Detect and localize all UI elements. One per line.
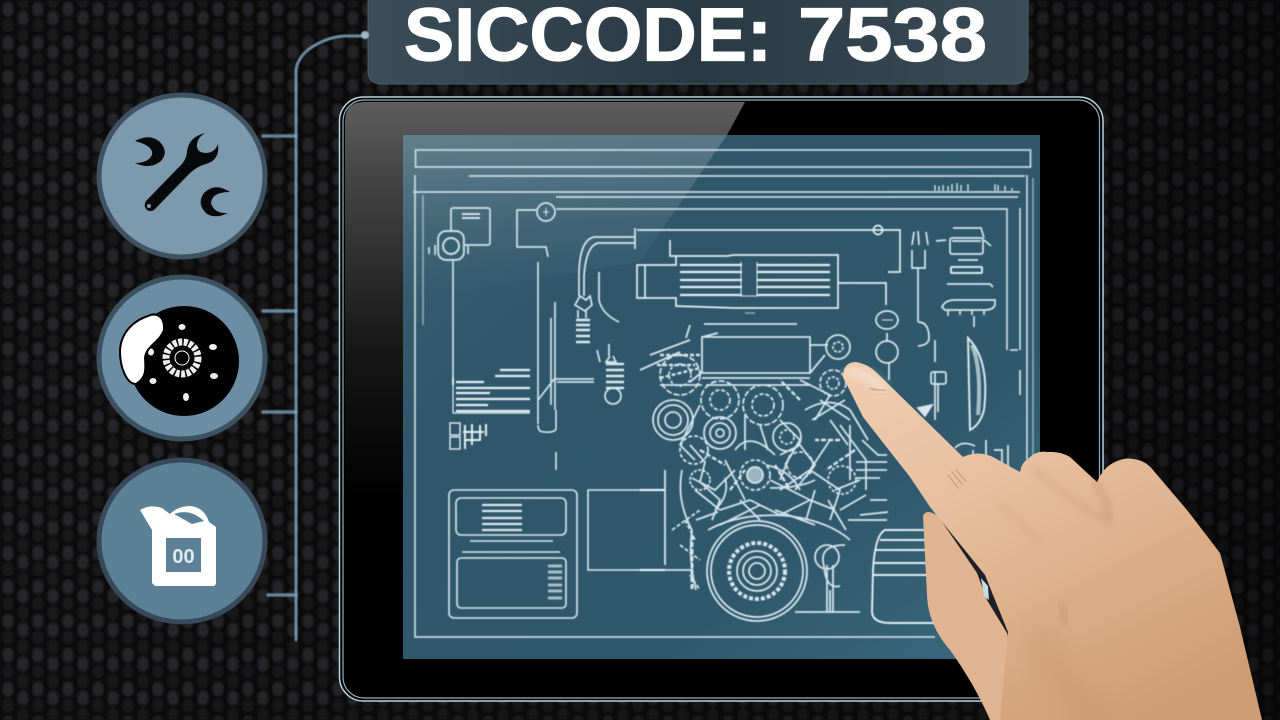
blueprint: right hand components xyxy=(876,228,1020,470)
hand pointing at screen xyxy=(843,362,1262,720)
connector lines xyxy=(263,31,369,640)
thumb xyxy=(923,512,1020,720)
blueprint: empty box xyxy=(588,490,665,570)
blueprint: gauge and left piping xyxy=(429,203,594,424)
engine: crank pulley xyxy=(707,521,807,621)
blueprint: bottom left panel xyxy=(449,490,665,618)
blueprint: lower right housing xyxy=(872,530,960,623)
engine: pulleys and gears xyxy=(653,335,856,569)
blueprint: intake pipes and small fittings xyxy=(575,228,635,404)
icon circle: brake disc xyxy=(99,277,265,439)
fingernail edge xyxy=(870,388,886,391)
screen xyxy=(403,135,1040,659)
engine: block squiggles xyxy=(640,340,888,590)
hand shading xyxy=(850,372,1110,720)
screen glare xyxy=(403,135,727,300)
blueprint frame lines xyxy=(413,150,1033,637)
blueprint: small readouts top right xyxy=(935,183,1012,191)
icon: disc xyxy=(120,306,239,416)
blueprint: left data block xyxy=(450,370,556,470)
icon: wrench xyxy=(135,133,230,216)
title banner xyxy=(368,0,1028,84)
engine: top cover xyxy=(686,324,828,373)
icon circle: oil can xyxy=(99,460,265,622)
blueprint glint xyxy=(981,578,989,600)
hand and pointing finger xyxy=(843,362,1262,720)
tablet bezel sheen xyxy=(345,102,745,659)
icon: jerry can xyxy=(140,506,216,586)
icon circle: wrench and spanners xyxy=(99,95,265,257)
blueprint: radiator xyxy=(637,226,900,313)
tablet xyxy=(340,97,1103,701)
icon: jerry can: 00 xyxy=(172,546,195,568)
shadow between thumb and palm xyxy=(938,512,1010,640)
engine drawing xyxy=(640,324,888,621)
